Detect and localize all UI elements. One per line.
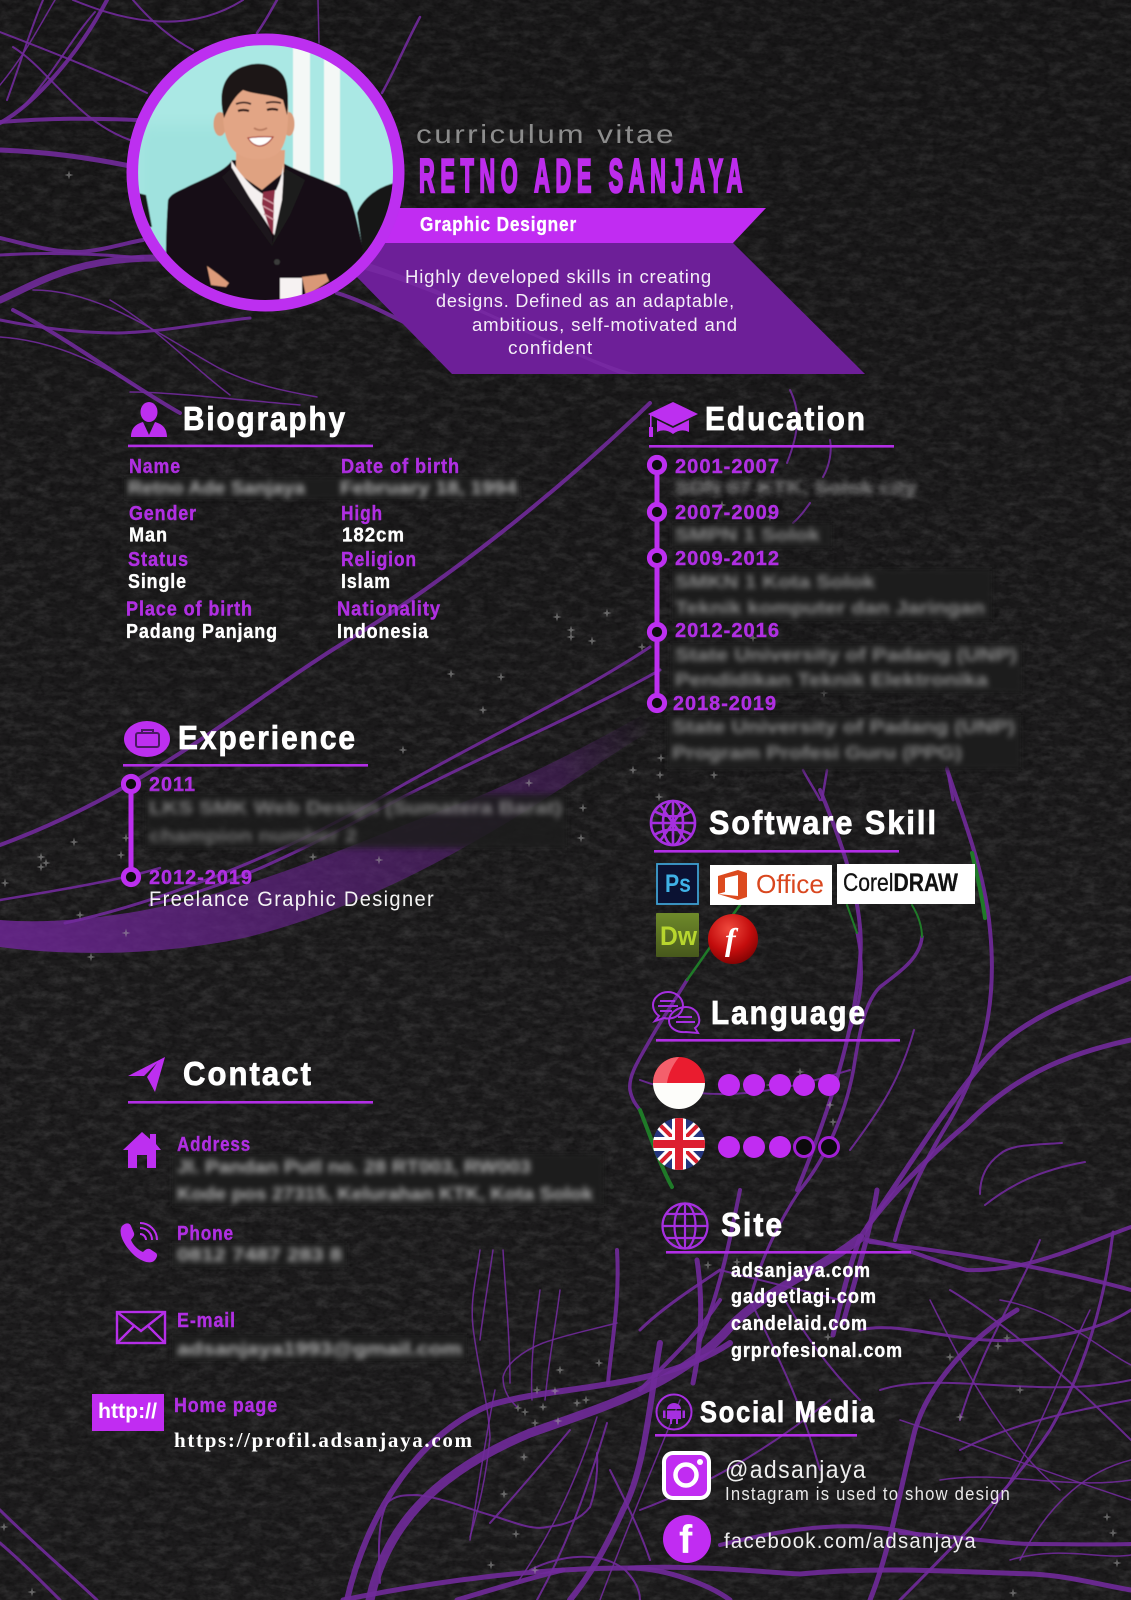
icon: person xyxy=(131,402,167,437)
logo: photoshop xyxy=(657,864,698,904)
e-mail: E-mail xyxy=(177,1310,236,1332)
heading: biography: Biography xyxy=(183,400,347,437)
eyes, brows, nose, smile xyxy=(236,102,281,104)
site list: candelaid.com xyxy=(731,1313,868,1335)
panel: language xyxy=(653,992,900,1170)
biography fields xyxy=(124,456,519,643)
address xyxy=(172,1134,604,1206)
education timeline: State University of Padang (UNP) xyxy=(675,645,1017,665)
home page: https://profil.adsanjaya.com xyxy=(174,1428,472,1452)
icon: facebook xyxy=(663,1515,711,1563)
logo: dreamweaver: Dw xyxy=(660,921,698,951)
education timeline: SDN 07 KTK, Solok city xyxy=(675,478,917,498)
education timeline: SMKN 1 Kota Solok xyxy=(675,572,876,592)
e-mail: adsanjaya1993@gmail.com xyxy=(177,1339,462,1359)
flag: united kingdom xyxy=(653,1118,705,1170)
flag: indonesia xyxy=(653,1057,705,1109)
phone xyxy=(172,1223,347,1267)
instagram handle xyxy=(725,1456,1011,1504)
infographic canvas: RETNO ADE SANJAYA xyxy=(419,149,748,202)
biography fields: Name xyxy=(129,456,181,478)
education timeline: 2007-2009 xyxy=(675,502,780,524)
education timeline: 2009-2012 xyxy=(675,548,780,570)
right side curves xyxy=(630,390,1131,1600)
heading: language: Language xyxy=(711,994,867,1031)
logo: office xyxy=(710,865,832,905)
education timeline: Teknik komputer dan Jaringan xyxy=(675,598,985,618)
biography fields: Gender xyxy=(129,503,197,525)
logo: photoshop: Ps xyxy=(665,870,691,898)
summary text: ambitious, self-motivated and xyxy=(472,315,738,335)
biography fields: Nationality xyxy=(337,598,441,620)
education timeline: SMPN 1 Solok xyxy=(675,525,821,545)
summary text: Highly developed skills in creating xyxy=(405,267,712,287)
education timeline: 2018-2019 xyxy=(673,693,777,715)
hands and cuff xyxy=(207,266,229,287)
suit xyxy=(166,160,365,301)
icon: chat bubbles xyxy=(653,992,699,1033)
panel: biography xyxy=(124,400,519,643)
heading: software skill: Software Skill xyxy=(709,804,938,841)
rating: english three of five xyxy=(718,1136,838,1158)
summary text: designs. Defined as an adaptable, xyxy=(436,291,735,311)
panel: contact xyxy=(92,1055,604,1452)
biography fields: Place of birth xyxy=(126,598,253,620)
biography fields: Status xyxy=(128,549,189,571)
logo: coreldraw xyxy=(837,864,975,904)
panel: site xyxy=(662,1204,911,1362)
logo: dreamweaver xyxy=(656,913,699,957)
education timeline: 2012-2016 xyxy=(675,620,780,642)
neck and shirt xyxy=(236,150,285,190)
rating: indonesian five of five xyxy=(718,1074,840,1096)
icon: graduation cap xyxy=(648,402,698,437)
phone: 0812 7487 283 8 xyxy=(177,1245,342,1265)
biography fields: Islam xyxy=(341,571,391,593)
education timeline: 2001-2007 xyxy=(675,456,780,478)
top-left curves xyxy=(0,0,440,413)
site list xyxy=(731,1260,903,1362)
biography fields: Date of birth xyxy=(341,456,460,478)
education timeline xyxy=(649,456,1022,769)
heading: site: Site xyxy=(721,1206,784,1243)
logo: office: Office xyxy=(756,869,824,899)
experience timeline: 2011 xyxy=(149,774,196,796)
icon: paper plane xyxy=(128,1057,165,1092)
site list: adsanjaya.com xyxy=(731,1260,871,1282)
panel: education xyxy=(648,400,1022,769)
heading: contact: Contact xyxy=(183,1055,313,1092)
home page xyxy=(174,1395,472,1452)
ears xyxy=(214,112,226,136)
icon: http box xyxy=(92,1394,164,1431)
home page: Home page xyxy=(174,1395,278,1417)
panel: software skill xyxy=(651,801,975,964)
instagram handle: Instagram is used to show design xyxy=(725,1484,1011,1504)
green accent segments xyxy=(640,853,985,1187)
icon: android xyxy=(656,1394,692,1430)
heading: education: Education xyxy=(705,400,867,437)
icon: globe xyxy=(662,1204,708,1248)
address: Jl. Pandan Putl no. 28 RT003, RW003 xyxy=(177,1157,531,1177)
biography fields: Padang Panjang xyxy=(126,621,278,643)
icon: phone xyxy=(121,1223,157,1262)
header ribbon: dark purple summary panel xyxy=(352,243,865,374)
icon: envelope xyxy=(117,1312,165,1343)
panel: social media xyxy=(655,1394,1011,1563)
address: Kode pos 27315, Kelurahan KTK, Kota Solok xyxy=(177,1184,594,1204)
brush stroke band xyxy=(0,705,660,953)
facebook handle: facebook.com/adsanjaya xyxy=(724,1530,977,1553)
phone: Phone xyxy=(177,1223,234,1245)
e-mail xyxy=(172,1310,467,1361)
biography fields: 182cm xyxy=(342,524,405,546)
heading: experience: Experience xyxy=(178,719,357,756)
biography fields: Indonesia xyxy=(337,621,429,643)
profile photo xyxy=(126,34,404,312)
biography fields: February 18, 1994 xyxy=(340,478,517,498)
heading: social media: Social Media xyxy=(700,1396,876,1429)
site list: gadgetlagi.com xyxy=(731,1286,877,1308)
icon: house xyxy=(123,1132,161,1168)
header ribbon: job title banner xyxy=(368,208,766,243)
bottom-left curves xyxy=(0,1510,97,1600)
biography fields: Single xyxy=(128,571,187,593)
biography fields: Man xyxy=(129,524,168,546)
biography fields: High xyxy=(341,503,383,525)
education timeline: State University of Padang (UNP) xyxy=(672,717,1015,737)
biography fields: Religion xyxy=(341,549,417,571)
icon: facebook: f xyxy=(679,1518,693,1562)
education timeline: Pendidikan Teknik Elektronika xyxy=(675,670,989,690)
icon: wire globe xyxy=(651,801,695,845)
icon: http box: http:// xyxy=(98,1400,157,1423)
hair xyxy=(222,64,288,118)
icon: briefcase xyxy=(124,721,170,757)
site list: grprofesional.com xyxy=(731,1340,903,1362)
header ribbon: job title banner: Graphic Designer xyxy=(420,214,577,236)
education timeline: Program Profesi Guru (PPG) xyxy=(672,743,962,763)
experience timeline: 2012-2019 xyxy=(149,867,253,889)
experience timeline: champion number 2 xyxy=(149,826,357,846)
summary text: confident xyxy=(508,338,593,358)
logo: flash xyxy=(708,914,758,964)
experience timeline xyxy=(123,774,567,911)
address: Address xyxy=(177,1134,251,1156)
experience timeline: LKS SMK Web Design (Sumatera Barat) xyxy=(149,798,562,818)
subtitle: curriculum vitae: curriculum vitae xyxy=(416,119,676,149)
face xyxy=(224,89,289,152)
long diagonal arcs xyxy=(0,403,660,923)
icon: instagram xyxy=(662,1451,711,1500)
logo: flash: f xyxy=(725,921,739,957)
bottom-centre curves xyxy=(343,1190,877,1600)
panel: experience xyxy=(123,719,567,911)
experience timeline: Freelance Graphic Designer xyxy=(149,888,435,911)
logo: coreldraw: CorelDRAW xyxy=(843,869,958,897)
biography fields: Retno Ade Sanjaya xyxy=(128,478,306,498)
summary text xyxy=(405,267,738,358)
instagram handle: @adsanjaya xyxy=(725,1456,867,1484)
